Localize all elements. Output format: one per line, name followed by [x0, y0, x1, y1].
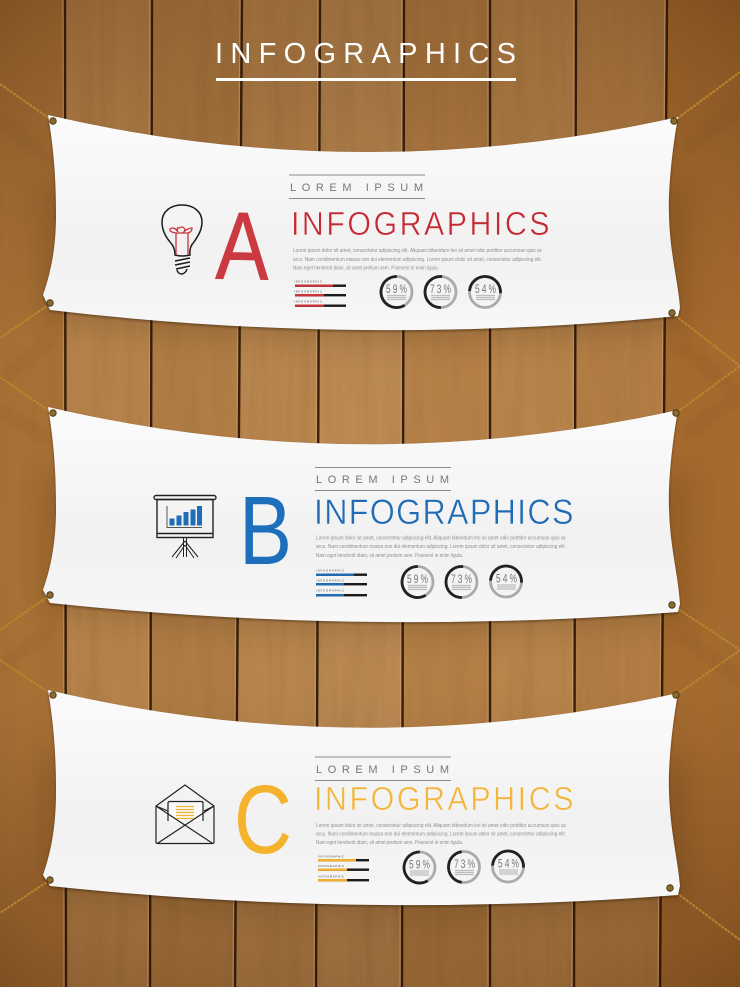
- body text B: Lorem ipsum dolor sit amet, consectetur adipiscing elit. Aliquam bibendum leo sit amet odio porttitor accumsan quis ac: [316, 536, 566, 542]
- bar chart A: INFOGRAPHIC: [294, 300, 322, 304]
- banner B cloth: [43, 407, 680, 622]
- heading C: INFOGRAPHICS: [314, 780, 573, 817]
- banner C edge shadow: [43, 692, 680, 907]
- donut A 54%: 54%: [475, 284, 496, 296]
- banner B: [43, 407, 680, 624]
- donut C 54%: 54%: [498, 858, 519, 871]
- banner B edge shadow: [43, 408, 680, 624]
- donut charts B: [396, 561, 523, 603]
- donut C 73%: 73%: [454, 859, 475, 871]
- bar chart A: INFOGRAPHIC: [294, 290, 322, 294]
- bar chart B: [316, 568, 367, 596]
- donut A 59%: 59%: [386, 284, 407, 296]
- bar chart B: INFOGRAPHIC: [316, 578, 344, 582]
- donut B 54%: 54%: [496, 573, 517, 586]
- header: lorem ipsum: [289, 174, 425, 199]
- body text A: [293, 248, 542, 272]
- rope shadows: [0, 105, 740, 680]
- bar chart C: INFOGRAPHIC: [318, 854, 344, 858]
- bar chart C: INFOGRAPHIC: [318, 874, 344, 878]
- donut charts C: [398, 846, 525, 889]
- banner B eyelets: [47, 410, 679, 608]
- banner shadows: [40, 180, 690, 919]
- icon: envelope: [156, 785, 214, 844]
- body text A: arcu. Nam condimentum massa non dui elementum adipiscing. Lorem ipsum dolor sit amet, consectetur adipiscing elit.: [293, 257, 542, 263]
- donut B 59%: 59%: [407, 574, 428, 586]
- banner C: [43, 690, 680, 907]
- banner A edge shadow: [43, 116, 680, 332]
- icon: light bulb: [162, 205, 202, 274]
- donut C 59%: 59%: [409, 859, 430, 872]
- bar chart C: [318, 854, 369, 881]
- bar chart B: INFOGRAPHIC: [316, 568, 344, 572]
- icon: presentation board: [154, 496, 216, 558]
- donut A 73%: 73%: [430, 284, 451, 296]
- donut charts A: [375, 271, 502, 313]
- bar chart B: INFOGRAPHIC: [316, 588, 344, 592]
- banner C cloth: [43, 690, 680, 905]
- body text A: Lorem ipsum dolor sit amet, consectetur adipiscing elit. Aliquam bibendum leo sit amet odio porttitor accumsan quis ac: [293, 248, 542, 254]
- banner A eyelets: [47, 118, 677, 316]
- body text B: Nam eget hendrerit diam, sit amet pretium sem. Praesent in enim ligula.: [316, 553, 463, 559]
- header: lorem ipsum: LOREM IPSUM: [290, 182, 423, 194]
- heading A: INFOGRAPHICS: [291, 205, 550, 242]
- header: lorem ipsum: LOREM IPSUM: [316, 764, 449, 776]
- donut B 73%: 73%: [451, 574, 472, 586]
- header: lorem ipsum: LOREM IPSUM: [316, 474, 449, 486]
- letter C: C: [234, 765, 292, 874]
- bar chart A: INFOGRAPHIC: [294, 280, 322, 284]
- bar chart C: INFOGRAPHIC: [318, 864, 344, 868]
- title: INFOGRAPHICS: [215, 38, 516, 70]
- body text C: [316, 823, 566, 846]
- header: lorem ipsum: [315, 756, 451, 781]
- letter A: A: [215, 192, 270, 301]
- letter B: B: [239, 476, 292, 585]
- body text C: Lorem ipsum dolor sit amet, consectetur adipiscing elit. Aliquam bibendum leo sit amet odio porttitor accumsan quis ac: [316, 823, 566, 829]
- body text B: arcu. Nam condimentum massa non dui elementum adipiscing. Lorem ipsum dolor sit amet, consectetur adipiscing elit.: [316, 544, 566, 550]
- heading B: INFOGRAPHICS: [314, 494, 573, 532]
- body text A: Nam eget hendrerit diam, sit amet pretium sem. Praesent in enim ligula.: [293, 266, 439, 272]
- banner A cloth: [43, 115, 680, 330]
- header: lorem ipsum: [315, 467, 451, 491]
- banner C eyelets: [47, 692, 679, 891]
- banner A: [43, 115, 680, 332]
- body text B: [316, 536, 566, 559]
- body text C: arcu. Nam condimentum massa non dui elementum adipiscing. Lorem ipsum dolor sit amet, consectetur adipiscing elit.: [316, 832, 566, 838]
- body text C: Nam eget hendrerit diam, sit amet pretium sem. Praesent in enim ligula.: [316, 840, 463, 846]
- bar chart A: [294, 280, 346, 307]
